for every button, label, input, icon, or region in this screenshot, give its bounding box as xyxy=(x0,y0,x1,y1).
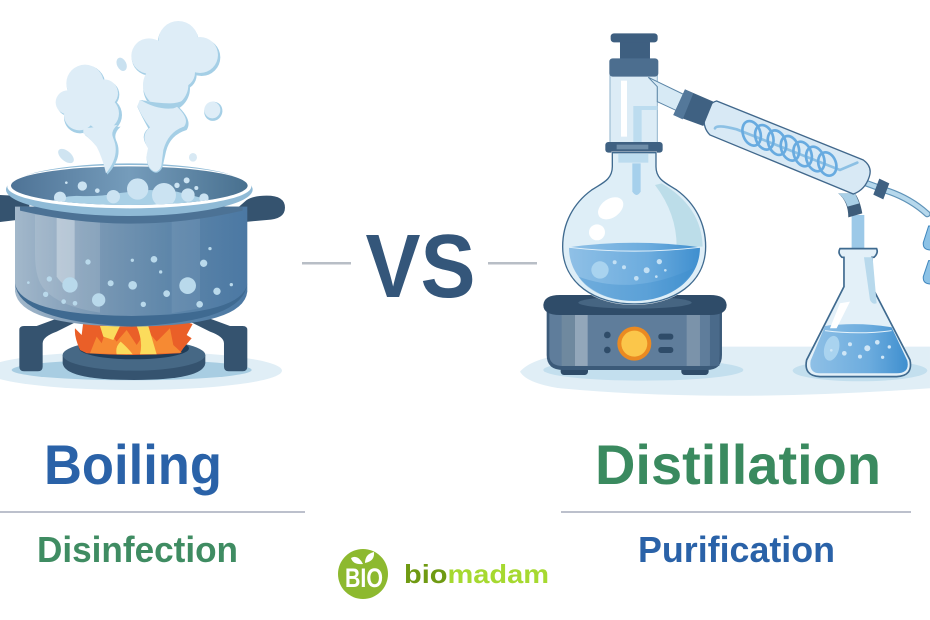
floor shadow xyxy=(0,351,282,390)
connector dash left xyxy=(302,262,351,264)
heading: Boiling: Boiling xyxy=(44,433,222,496)
flame xyxy=(75,322,193,355)
logo: biomadam xyxy=(338,549,549,599)
condenser outlet tube xyxy=(867,183,927,214)
subheading: Disinfection: Disinfection xyxy=(37,529,238,570)
condenser collars xyxy=(673,89,889,199)
water drops xyxy=(923,226,930,284)
condenser inlet tube xyxy=(648,77,685,111)
logo wordmark: biomadam xyxy=(404,559,549,589)
subheading: Purification: Purification xyxy=(638,529,835,570)
connector dash right xyxy=(488,262,537,264)
stove legs xyxy=(19,319,247,371)
pot body xyxy=(15,207,247,327)
collector spout stream xyxy=(838,193,864,252)
pot handles xyxy=(0,195,285,233)
divider left xyxy=(0,511,305,513)
illustration: distillation apparatus xyxy=(520,33,930,396)
conical flask xyxy=(806,249,911,377)
distillation column xyxy=(605,33,663,153)
VS heading: VS xyxy=(366,217,476,317)
hot plate xyxy=(543,295,727,375)
logo badge xyxy=(338,549,388,599)
bench shadow xyxy=(520,347,930,396)
condenser jacket with coil xyxy=(704,101,870,194)
logo badge: BIO xyxy=(345,563,383,593)
steam clouds xyxy=(56,21,226,175)
pot rim and boiling water xyxy=(6,163,253,216)
bubbles in pot wall xyxy=(27,247,233,308)
divider right xyxy=(561,511,911,513)
burner xyxy=(63,337,205,380)
heading: Distillation: Distillation xyxy=(595,433,881,496)
round-bottom flask xyxy=(563,153,706,304)
illustration: boiling pot on burner xyxy=(0,21,285,390)
control knob xyxy=(617,327,651,361)
